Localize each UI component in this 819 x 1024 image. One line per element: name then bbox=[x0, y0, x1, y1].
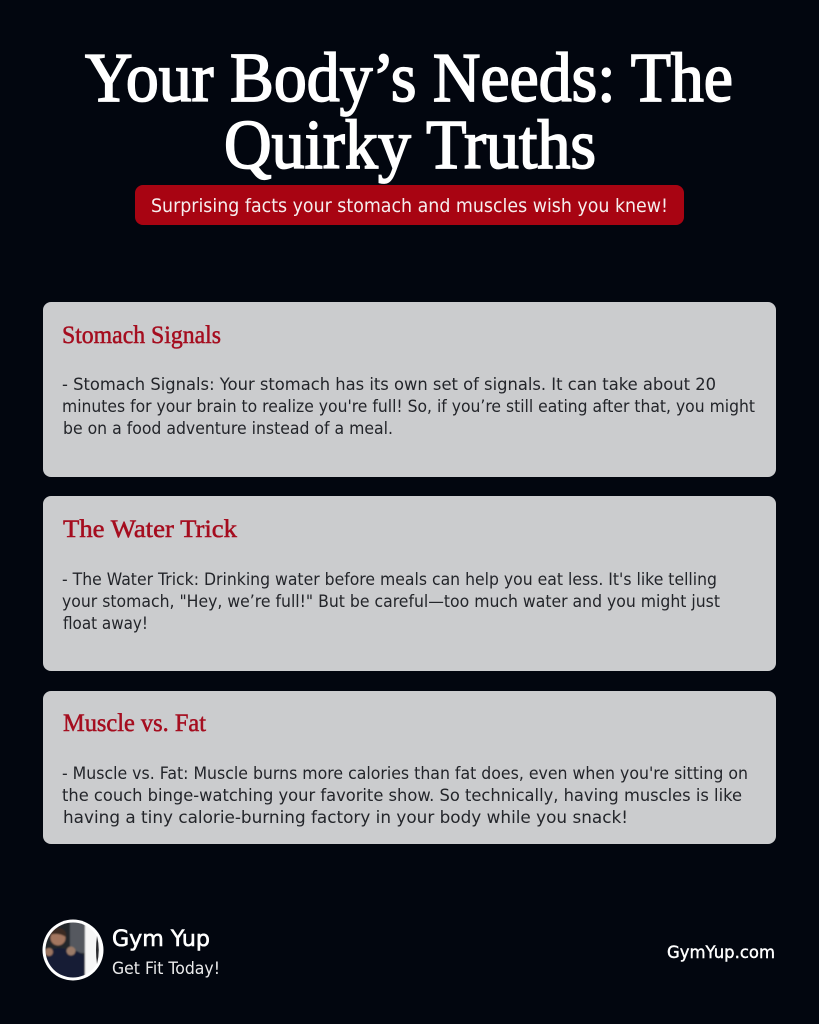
heading: stomach signals: Stomach Signals bbox=[62, 322, 221, 349]
body text: stomach signals: minutes for your brain to realize you're full! So, if you’re still eating after that, you might bbox=[62, 397, 755, 417]
title bbox=[85, 40, 733, 184]
title: Your Body’s Needs: The bbox=[85, 40, 733, 117]
body text: the water trick: float away! bbox=[63, 614, 148, 634]
panel: muscle vs fat bbox=[43, 691, 776, 844]
body text: muscle vs fat: having a tiny calorie-burning factory in your body while you snack! bbox=[63, 808, 628, 828]
body text: muscle vs fat: the couch binge-watching your favorite show. So technically, having muscles is like bbox=[62, 786, 742, 806]
body text: stomach signals bbox=[62, 375, 755, 439]
brand name: Gym Yup bbox=[112, 927, 210, 952]
body text: stomach signals: be on a food adventure instead of a meal. bbox=[63, 419, 393, 439]
body text: the water trick: your stomach, "Hey, we’re full!" But be careful—too much water and you might just bbox=[62, 592, 720, 612]
title: Quirky Truths bbox=[224, 107, 596, 184]
body text: the water trick bbox=[62, 570, 720, 634]
body text: the water trick: - The Water Trick: Drinking water before meals can help you eat less. It's like telling bbox=[62, 570, 717, 590]
body text: muscle vs fat bbox=[62, 764, 748, 828]
heading: muscle vs fat: Muscle vs. Fat bbox=[63, 710, 206, 737]
subtitle banner: Surprising facts your stomach and muscles wish you knew! bbox=[151, 195, 668, 217]
website: GymYup.com bbox=[667, 943, 775, 963]
heading: the water trick: The Water Trick bbox=[63, 516, 238, 543]
panel: the water trick bbox=[43, 496, 776, 671]
body text: stomach signals: - Stomach Signals: Your stomach has its own set of signals. It can take about 20 bbox=[62, 375, 716, 395]
subtitle banner bbox=[135, 185, 684, 225]
tagline: Get Fit Today! bbox=[112, 959, 220, 979]
icon: avatar bbox=[42, 920, 105, 980]
body text: muscle vs fat: - Muscle vs. Fat: Muscle burns more calories than fat does, even when you're sitting on bbox=[62, 764, 748, 784]
panel: stomach signals bbox=[43, 302, 776, 477]
